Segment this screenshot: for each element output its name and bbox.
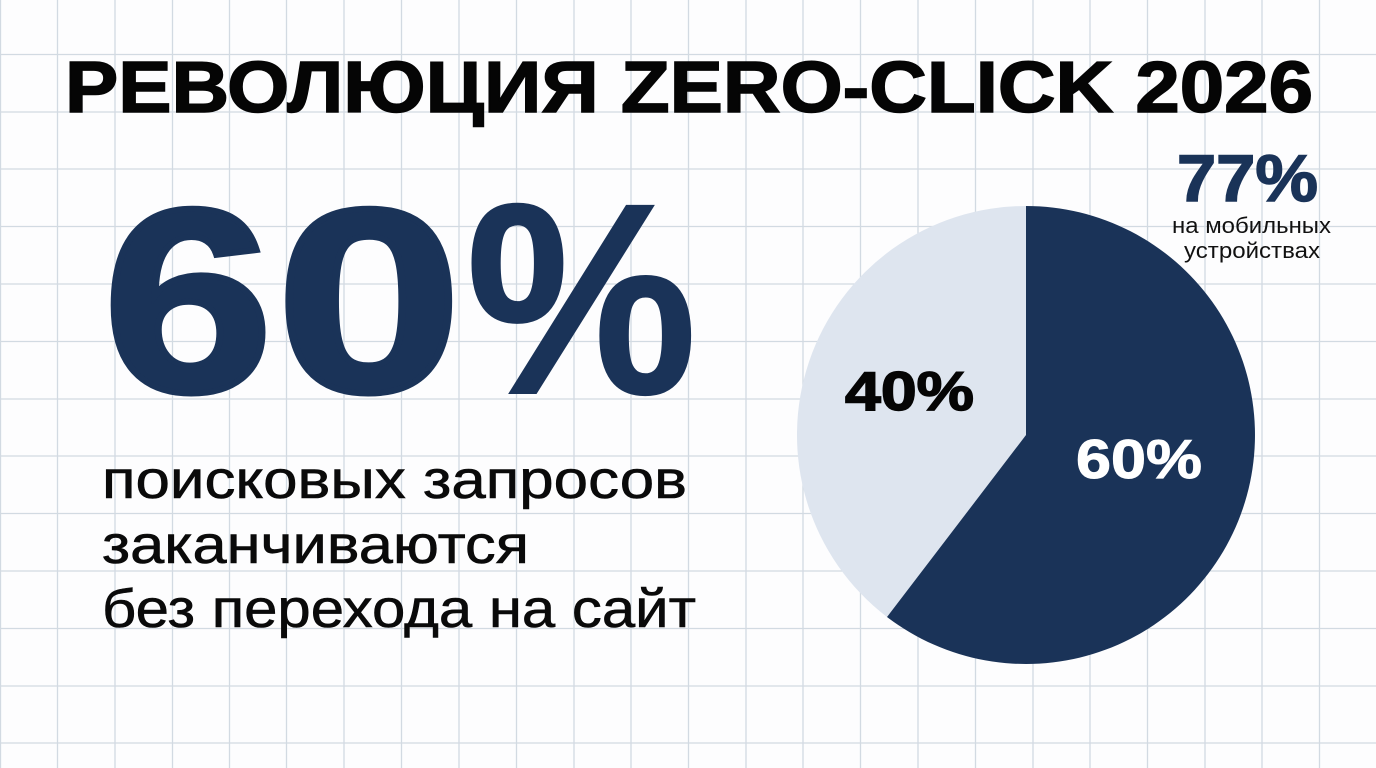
big stat: 60%: 6 bbox=[103, 156, 273, 447]
big stat: 60%: 0 bbox=[276, 156, 462, 447]
callout caption: на мобильных bbox=[1172, 213, 1331, 238]
callout: mobile 77% bbox=[1172, 141, 1331, 263]
pie segment: 40% bbox=[797, 206, 1026, 617]
callout caption bbox=[1172, 213, 1331, 263]
pie segment: 60% bbox=[887, 206, 1255, 664]
label: 40%: 40% bbox=[845, 360, 974, 422]
text block: description bbox=[102, 450, 696, 639]
label: 60%: 60% bbox=[1076, 428, 1202, 490]
text block: description: заканчиваются bbox=[102, 515, 529, 575]
title: РЕВОЛЮЦИЯ ZERO-CLICK 2026 bbox=[65, 48, 1313, 128]
text block: description: без перехода на сайт bbox=[102, 579, 696, 639]
pie chart bbox=[797, 206, 1255, 664]
callout caption: устройствах bbox=[1184, 238, 1320, 263]
big stat: 60% bbox=[103, 147, 697, 451]
callout number: 77% bbox=[1177, 141, 1318, 215]
big stat: 60%: % bbox=[466, 147, 697, 451]
text block: description: поисковых запросов bbox=[102, 450, 687, 510]
